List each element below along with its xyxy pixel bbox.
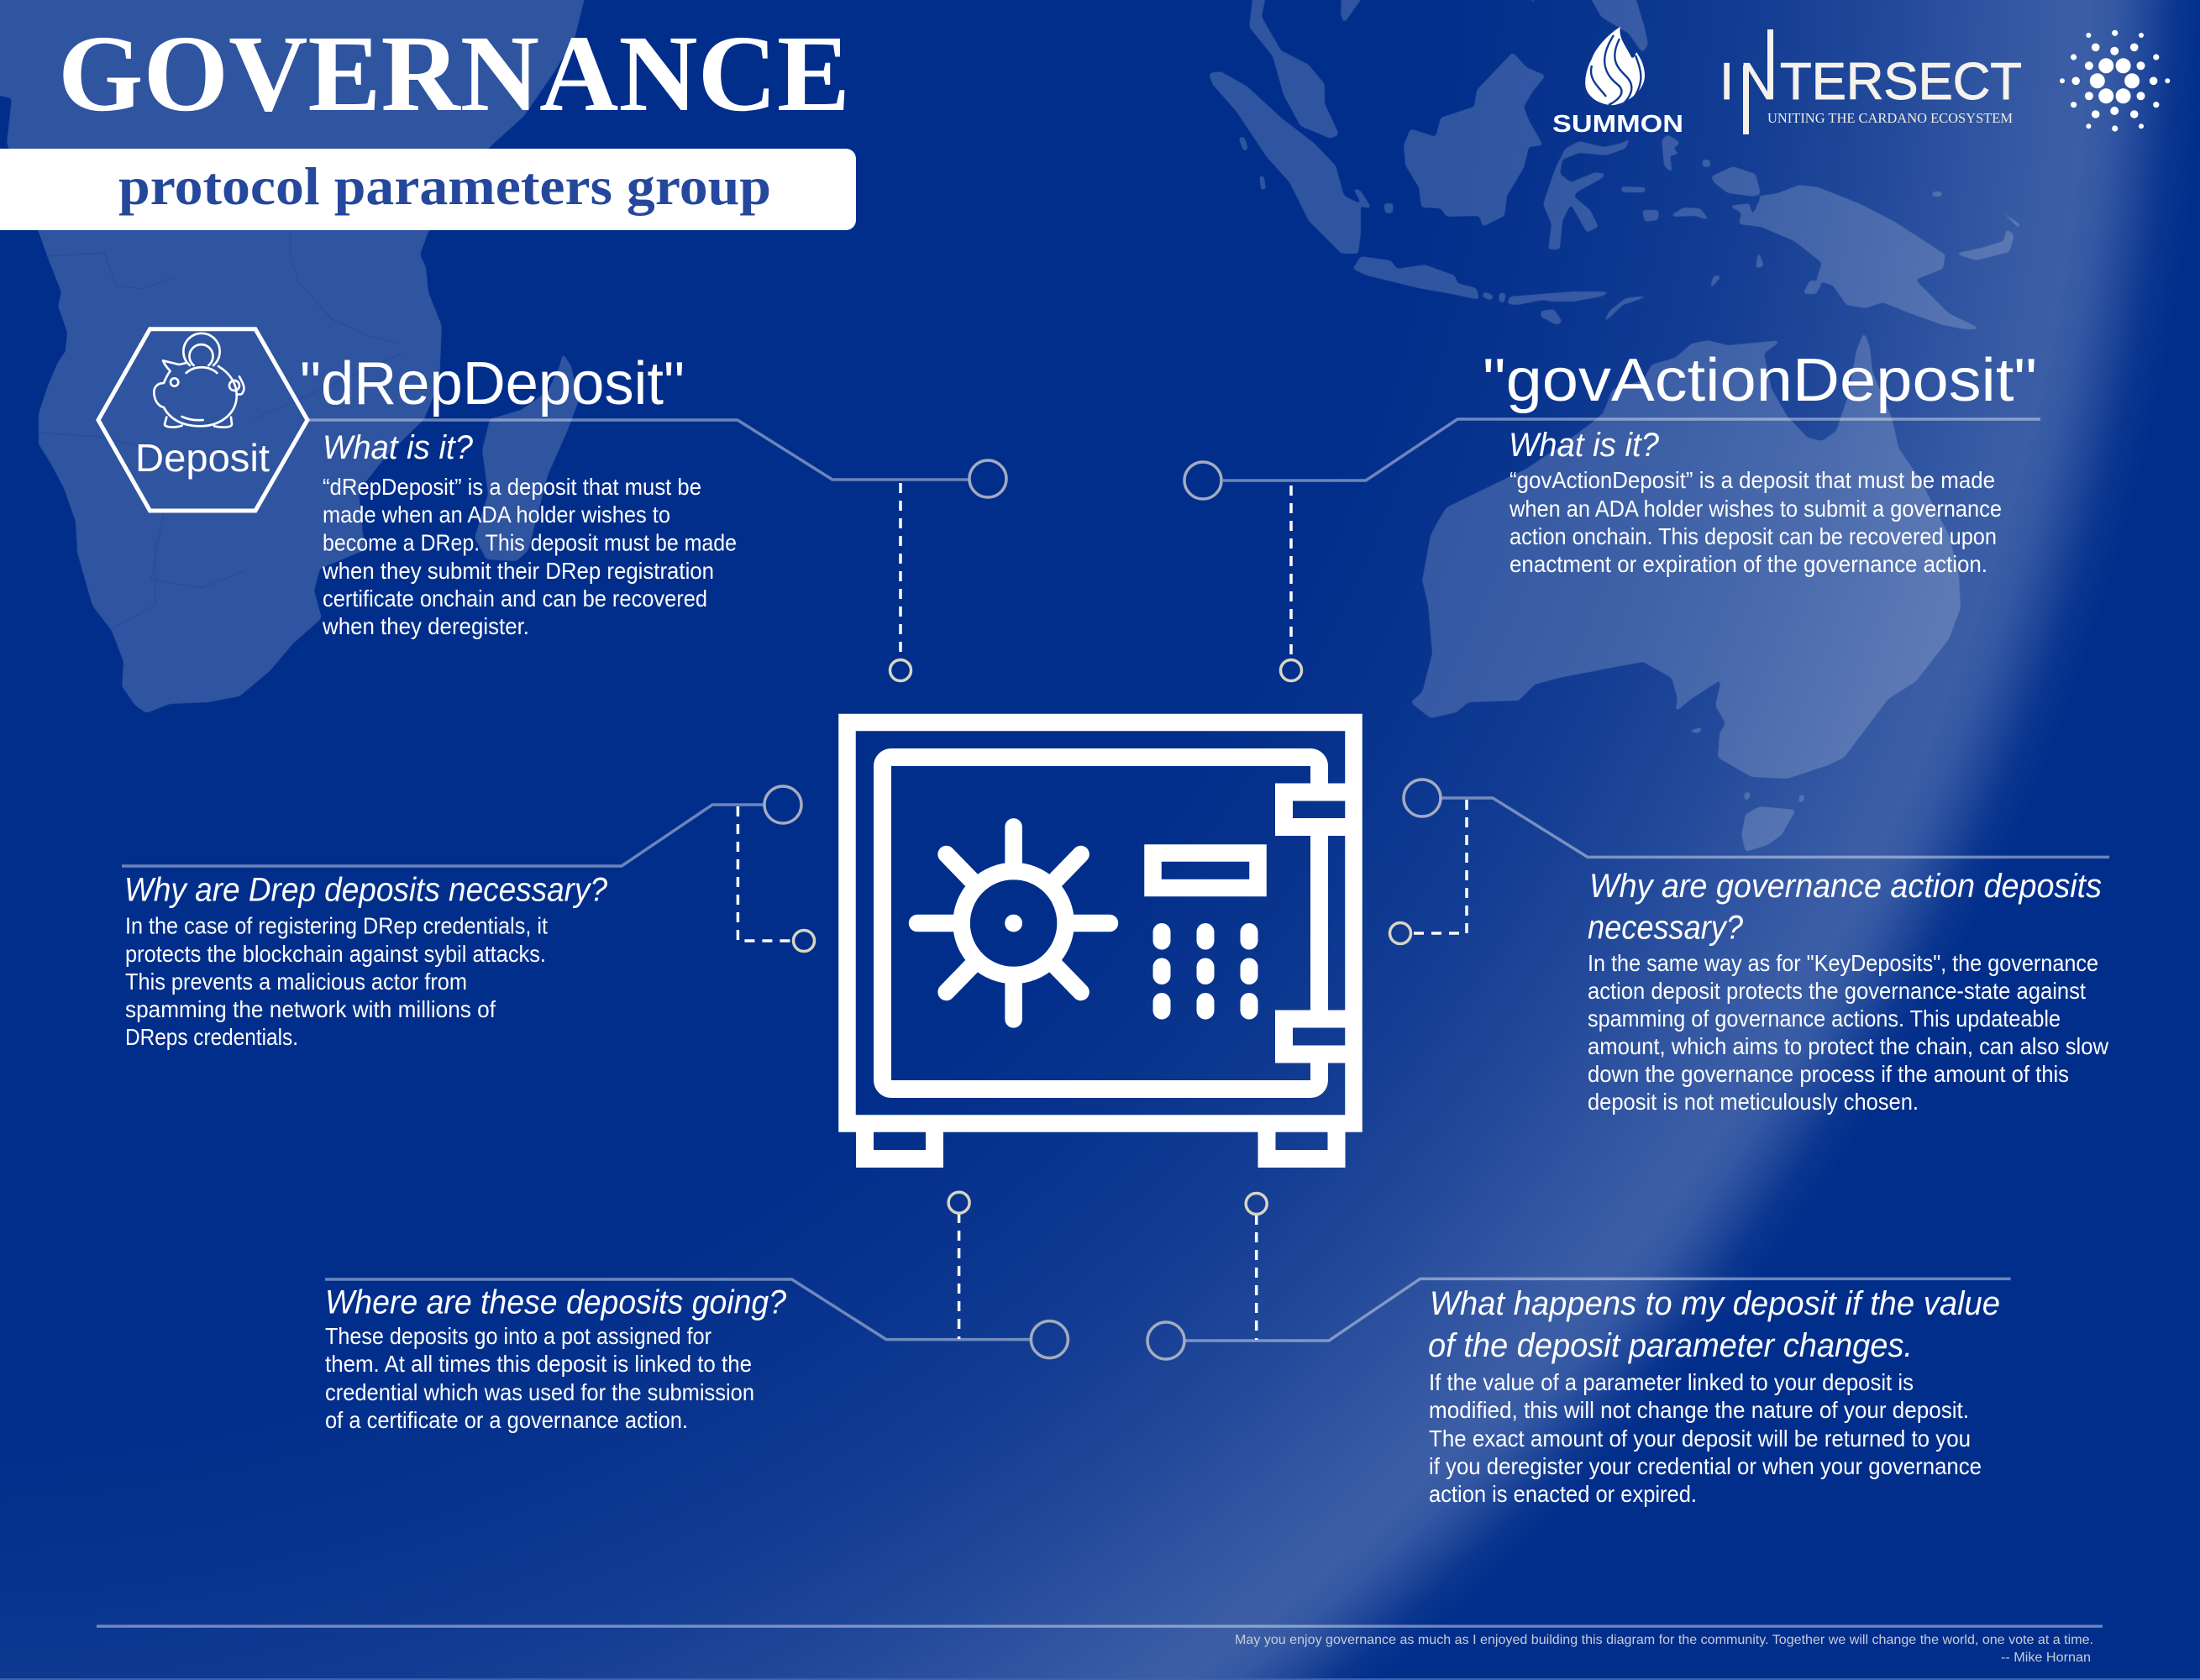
connector: where deposits go bbox=[325, 1192, 1068, 1358]
panel: govActionDeposit bbox=[1483, 347, 2037, 577]
icon: piggy bank bbox=[154, 333, 244, 428]
heading: Why are governance action deposits bbox=[1589, 868, 2102, 905]
wordmark: SUMMON bbox=[1552, 111, 1683, 138]
map: Madagascar bbox=[475, 353, 579, 561]
connector: dRepDeposit bbox=[309, 420, 1006, 680]
map: Kangaroo Island bbox=[1685, 727, 1704, 733]
body text: down the governance process if the amount of this bbox=[1588, 1061, 2069, 1087]
body text: “dRepDeposit” is a deposit that must be bbox=[323, 474, 701, 500]
heading: Why are Drep deposits necessary? bbox=[124, 872, 608, 909]
title: GOVERNANCE bbox=[58, 13, 850, 134]
body text: credential which was used for the submission bbox=[325, 1379, 754, 1405]
safe body bbox=[847, 722, 1354, 1124]
body text: If the value of a parameter linked to your deposit is bbox=[1429, 1369, 1914, 1395]
map: Sumatra bbox=[1209, 71, 1361, 254]
heading: necessary? bbox=[1588, 909, 1744, 946]
map: small western islands bbox=[1238, 136, 1394, 213]
body text: become a DRep. This deposit must be made bbox=[323, 529, 737, 556]
body text: amount, which aims to protect the chain, can also slow bbox=[1588, 1033, 2108, 1059]
body text: when they deregister. bbox=[322, 613, 529, 639]
panel: dRepDeposit bbox=[300, 350, 737, 639]
body text: action is enacted or expired. bbox=[1429, 1481, 1697, 1507]
heading: of the deposit parameter changes. bbox=[1428, 1327, 1913, 1364]
deposit badge bbox=[98, 329, 307, 511]
footer signature: -- Mike Hornan bbox=[2001, 1651, 2091, 1665]
map: northern islands bbox=[1341, 0, 1648, 53]
feet bbox=[865, 1130, 1336, 1159]
subtitle: protocol parameters group bbox=[118, 157, 771, 216]
subheading: What is it? bbox=[1509, 427, 1660, 464]
body text: These deposits go into a pot assigned for bbox=[325, 1323, 711, 1349]
body text bbox=[1588, 950, 2108, 1115]
body text: spamming the network with millions of bbox=[125, 996, 496, 1022]
body text: “govActionDeposit” is a deposit that must be made bbox=[1510, 467, 1995, 493]
body text: made when an ADA holder wishes to bbox=[323, 501, 670, 528]
heading: "dRepDeposit" bbox=[300, 350, 685, 417]
body text: when they submit their DRep registration bbox=[322, 558, 714, 584]
map: Tasmania bbox=[1741, 792, 1805, 852]
page edge lines bbox=[0, 1678, 2200, 1680]
body text: DReps credentials. bbox=[125, 1024, 298, 1050]
safe door bbox=[882, 758, 1319, 1089]
body text: In the case of registering DRep credentials, it bbox=[125, 912, 548, 939]
N extended strokes bbox=[1746, 29, 1771, 134]
body text: of a certificate or a governance action. bbox=[325, 1407, 688, 1433]
subheading: What is it? bbox=[323, 429, 474, 466]
body text: The exact amount of your deposit will be returned to you bbox=[1429, 1425, 1971, 1452]
footer bbox=[97, 1626, 2103, 1665]
body text: In the same way as for "KeyDeposits", the governance bbox=[1588, 950, 2098, 976]
flame mark bbox=[1585, 27, 1645, 106]
map: Java bbox=[1352, 256, 1479, 300]
dial bbox=[917, 827, 1110, 1019]
body text bbox=[125, 912, 548, 1050]
heading bbox=[1428, 1285, 2000, 1364]
body text: spamming of governance actions. This updateable bbox=[1588, 1005, 2061, 1032]
connector: why Drep deposits bbox=[122, 786, 815, 951]
body text: action deposit protects the governance-state against bbox=[1588, 978, 2086, 1004]
logo: Cardano bbox=[2060, 30, 2170, 132]
body text: if you deregister your credential or when your governance bbox=[1429, 1453, 1982, 1479]
letters TERSECT: TERSECT bbox=[1780, 53, 2022, 111]
heading: "govActionDeposit" bbox=[1483, 347, 2037, 414]
connector: deposit value change bbox=[1147, 1193, 2011, 1359]
map: Africa bbox=[0, 0, 586, 713]
body text bbox=[1429, 1369, 1982, 1507]
logo: Intersect bbox=[1720, 29, 2022, 134]
heading: What happens to my deposit if the value bbox=[1430, 1285, 2000, 1322]
world map bbox=[0, 0, 2020, 852]
subtitle banner bbox=[0, 149, 856, 230]
map: Sumba bbox=[1541, 309, 1562, 325]
map: country borders bbox=[39, 232, 403, 630]
map: Moluccas bbox=[1620, 134, 1710, 222]
body text: modified, this will not change the nature of your deposit. bbox=[1429, 1397, 1969, 1423]
badge label: Deposit bbox=[135, 436, 270, 480]
logo: Summon bbox=[1552, 27, 1683, 138]
map: Melanesian islands bbox=[1709, 192, 2020, 294]
footer rule bbox=[97, 1625, 2103, 1628]
connector: govActionDeposit bbox=[1184, 419, 2040, 680]
map: Australia bbox=[1410, 332, 1961, 779]
map: Lesser Sunda islands bbox=[1483, 291, 1612, 305]
map: Sulawesi bbox=[1543, 136, 1631, 249]
body text: deposit is not meticulously chosen. bbox=[1588, 1089, 1919, 1115]
body text: This prevents a malicious actor from bbox=[125, 969, 467, 995]
map: New Guinea bbox=[1711, 166, 1982, 329]
panel: what happens to my deposit bbox=[1428, 1285, 2000, 1507]
tagline: UNITING THE CARDANO ECOSYSTEM bbox=[1767, 110, 2013, 126]
body text: certificate onchain and can be recovered bbox=[323, 585, 707, 612]
panel: why governance action deposits are necessary bbox=[1588, 868, 2108, 1115]
connector: why governance action deposits bbox=[1389, 780, 2109, 944]
panel: why Drep deposits are necessary bbox=[124, 872, 608, 1050]
banner background bbox=[0, 149, 856, 230]
map: Borneo bbox=[1404, 52, 1546, 227]
body text: when an ADA holder wishes to submit a governance bbox=[1509, 496, 2002, 522]
display bbox=[1153, 853, 1258, 888]
body text: action onchain. This deposit can be recovered upon bbox=[1510, 523, 1997, 549]
letter I: I bbox=[1720, 53, 1734, 111]
body text bbox=[1509, 467, 2002, 577]
body text: them. At all times this deposit is linked to the bbox=[325, 1351, 752, 1377]
hexagon bbox=[98, 329, 307, 511]
hinges bbox=[1284, 792, 1354, 1054]
heading bbox=[1588, 868, 2102, 946]
footer note: May you enjoy governance as much as I enjoyed building this diagram for the community. Together we will change the world, one vote at a time. bbox=[1235, 1633, 2093, 1647]
map: Timor bbox=[1601, 294, 1657, 326]
heading: Where are these deposits going? bbox=[325, 1284, 787, 1320]
body text bbox=[322, 474, 737, 639]
body text bbox=[325, 1323, 754, 1433]
body text: protects the blockchain against sybil attacks. bbox=[125, 941, 546, 967]
body text: enactment or expiration of the governance action. bbox=[1510, 551, 1987, 577]
map: Malay peninsula bbox=[1249, 0, 1339, 139]
keypad bbox=[1153, 923, 1258, 1020]
icon: safe bbox=[847, 722, 1354, 1159]
letter N: N bbox=[1740, 53, 1777, 111]
panel: where are these deposits going bbox=[325, 1284, 787, 1433]
